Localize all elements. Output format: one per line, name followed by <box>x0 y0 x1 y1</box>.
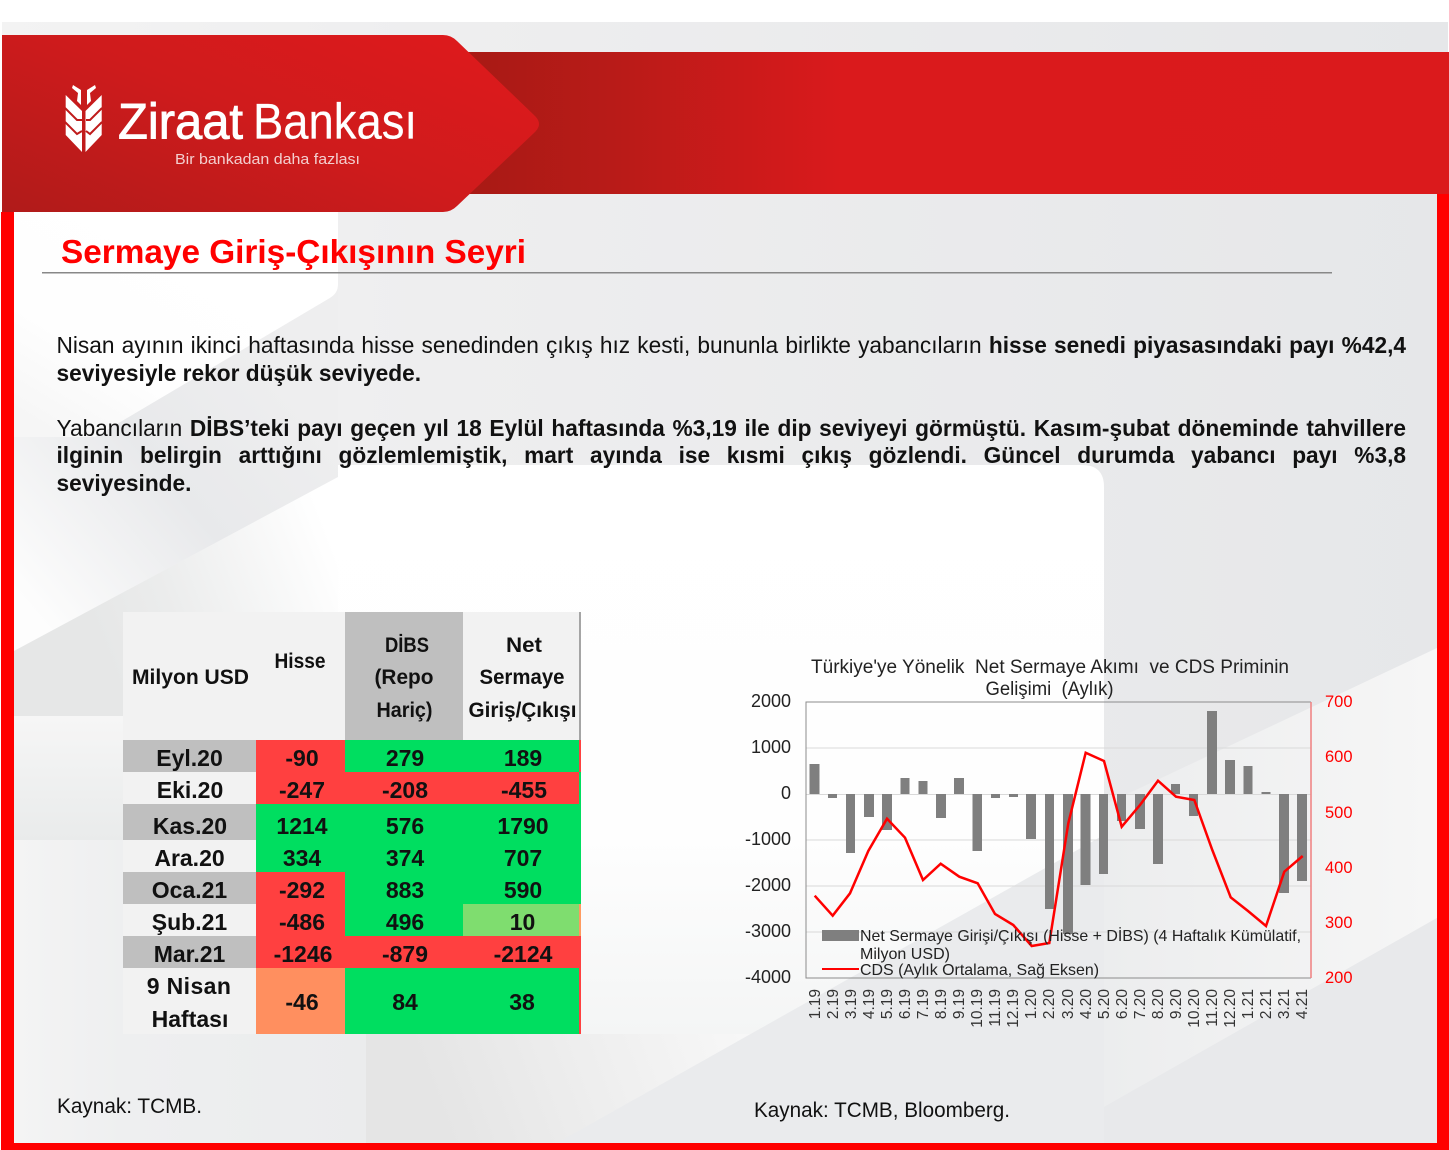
table values: 590 <box>504 877 542 903</box>
x axis labels: 4.21 <box>1294 989 1311 1019</box>
table values: -46 <box>285 989 319 1015</box>
table row labels: 9 Nisan <box>147 973 231 999</box>
text block: paragraph 1: Nisan ayının ikinci haftasında hisse senedinden çıkış hız kesti, bununla birlikte yabancıların hisse senedi piyasasındaki payı %42,4 <box>56 332 1406 358</box>
table values: -90 <box>285 745 319 771</box>
x axis labels: 2.20 <box>1041 989 1058 1019</box>
source: chart: Kaynak: TCMB, Bloomberg. <box>754 1099 1010 1122</box>
text block: paragraph 1 <box>56 332 1406 386</box>
bars: net capital flow <box>810 711 1307 934</box>
table <box>123 612 581 1034</box>
left axis labels: 0 <box>781 783 791 803</box>
left axis labels: -1000 <box>745 829 791 849</box>
x axis labels: 1.21 <box>1240 989 1257 1019</box>
x axis labels: 11.20 <box>1204 989 1221 1027</box>
left axis labels: -3000 <box>745 921 791 941</box>
table values: 334 <box>283 845 321 871</box>
table values: 374 <box>386 845 424 871</box>
table values: -2124 <box>494 941 553 967</box>
table values <box>256 740 581 1034</box>
source: table: Kaynak: TCMB. <box>57 1095 202 1118</box>
table header: DİBS <box>385 634 429 657</box>
table values: 883 <box>386 877 424 903</box>
table values: 1214 <box>276 813 328 839</box>
gridlines <box>806 748 1311 932</box>
table row labels: Kas.20 <box>153 813 227 839</box>
text block: paragraph 2: ilginin belirgin arttığını gözlemlemiştik, mart ayında ise kısmi çıkış gözlendi. Güncel durumda yabancı payı %3,8 <box>56 442 1406 468</box>
x axis labels: 12.19 <box>1005 989 1022 1028</box>
table header: Hisse <box>274 650 326 673</box>
x axis labels: 1.20 <box>1023 989 1040 1019</box>
left axis labels: -2000 <box>745 875 791 895</box>
x axis labels: 3.20 <box>1060 989 1077 1019</box>
x axis labels: 10.20 <box>1186 989 1203 1028</box>
x axis labels: 9.19 <box>951 989 968 1019</box>
table values: 189 <box>504 745 542 771</box>
right axis labels: 300 <box>1325 914 1353 932</box>
table values: -486 <box>279 909 325 935</box>
x axis labels: 11.19 <box>987 989 1004 1027</box>
x axis labels: 7.20 <box>1132 989 1149 1019</box>
x axis labels: 8.19 <box>933 989 950 1019</box>
table values: -1246 <box>274 941 332 967</box>
icon: wheat logo <box>65 85 102 152</box>
table values: 576 <box>386 813 424 839</box>
table values: -247 <box>279 777 325 803</box>
x axis labels: 7.19 <box>915 989 932 1019</box>
table values: -292 <box>279 877 325 903</box>
right axis labels: 400 <box>1325 859 1353 877</box>
x axis labels: 1.19 <box>807 989 824 1019</box>
x axis labels: 6.19 <box>897 989 914 1019</box>
x axis labels: 5.19 <box>879 989 896 1019</box>
table values: -208 <box>382 777 428 803</box>
x axis labels: 3.19 <box>843 989 860 1019</box>
table row labels: Eki.20 <box>157 777 223 803</box>
table row labels: Oca.21 <box>152 877 227 903</box>
table values: 38 <box>509 989 535 1015</box>
left axis labels: -4000 <box>745 967 791 987</box>
table header: Hariç) <box>376 699 432 722</box>
table header: Giriş/Çıkışı <box>468 699 576 722</box>
chart legend <box>822 926 1301 979</box>
x axis labels: 3.21 <box>1276 989 1293 1019</box>
x axis labels: 5.20 <box>1096 989 1113 1019</box>
right axis labels <box>1325 693 1353 987</box>
x axis labels: 9.20 <box>1168 989 1185 1019</box>
chart legend: Milyon USD) <box>860 946 950 963</box>
text block: paragraph 2: seviyesinde. <box>56 470 191 496</box>
table header: Net <box>506 634 542 657</box>
chart <box>745 657 1353 1028</box>
x axis labels: 2.21 <box>1258 989 1275 1019</box>
right axis labels: 500 <box>1325 804 1353 822</box>
x axis labels: 8.20 <box>1150 989 1167 1019</box>
table row labels: Mar.21 <box>154 941 226 967</box>
table header: Milyon USD <box>132 666 249 689</box>
table row labels: Eyl.20 <box>156 745 223 771</box>
title: Sermaye Giriş-Çıkışının Seyri <box>61 233 526 270</box>
left axis labels: 2000 <box>751 691 791 711</box>
text block: paragraph 1: seviyesiyle rekor düşük seviyede. <box>56 360 421 386</box>
right axis labels: 700 <box>1325 693 1353 711</box>
table values: -879 <box>382 941 428 967</box>
logo wordmark: Ziraat <box>118 94 243 150</box>
chart title <box>811 657 1289 700</box>
chart legend: Net Sermaye Girişi/Çıkışı (Hisse + DİBS) (4 Haftalık Kümülatif, <box>860 926 1301 945</box>
table values: 496 <box>386 909 424 935</box>
chart title: Gelişimi (Aylık) <box>986 679 1114 700</box>
logo tagline: Bir bankadan daha fazlası <box>175 152 360 168</box>
x axis labels: 4.19 <box>861 989 878 1019</box>
table row labels: Şub.21 <box>152 909 227 935</box>
x axis labels: 4.20 <box>1078 989 1095 1019</box>
line: CDS <box>815 753 1303 946</box>
header band <box>440 52 1449 194</box>
x axis labels <box>807 989 1311 1028</box>
right axis labels: 200 <box>1325 969 1353 987</box>
left axis labels: 1000 <box>751 737 791 757</box>
text block: paragraph 2: Yabancıların DİBS’teki payı geçen yıl 18 Eylül haftasında %3,19 ile dip seviyeyi görmüştü. Kasım-şubat döneminde tahvillere <box>56 415 1406 441</box>
plot border <box>806 702 1311 978</box>
table row labels: Haftası <box>152 1006 228 1032</box>
table header: Sermaye <box>480 666 564 689</box>
table row labels: Ara.20 <box>154 845 225 871</box>
chart legend: CDS (Aylık Ortalama, Sağ Eksen) <box>860 962 1099 979</box>
table values: 84 <box>392 989 418 1015</box>
table values: 1790 <box>497 813 549 839</box>
x axis labels: 2.19 <box>825 989 842 1019</box>
x axis labels: 6.20 <box>1114 989 1131 1019</box>
table row labels <box>123 740 256 1034</box>
x axis labels: 10.19 <box>969 989 986 1028</box>
chart title: Türkiye'ye Yönelik Net Sermaye Akımı ve CDS Priminin <box>811 657 1289 678</box>
logo wordmark second part: Bankası <box>253 94 417 150</box>
right axis labels: 600 <box>1325 748 1353 766</box>
text block: paragraph 2 <box>56 415 1406 496</box>
table header: (Repo <box>374 666 434 689</box>
table values: 10 <box>510 909 535 935</box>
x axis labels: 12.20 <box>1222 989 1239 1028</box>
left axis labels <box>745 691 791 987</box>
header arrow with logo <box>2 35 539 212</box>
table header <box>123 612 581 740</box>
table values: 279 <box>386 745 424 771</box>
table values: -455 <box>501 777 547 803</box>
table values: 707 <box>504 845 542 871</box>
